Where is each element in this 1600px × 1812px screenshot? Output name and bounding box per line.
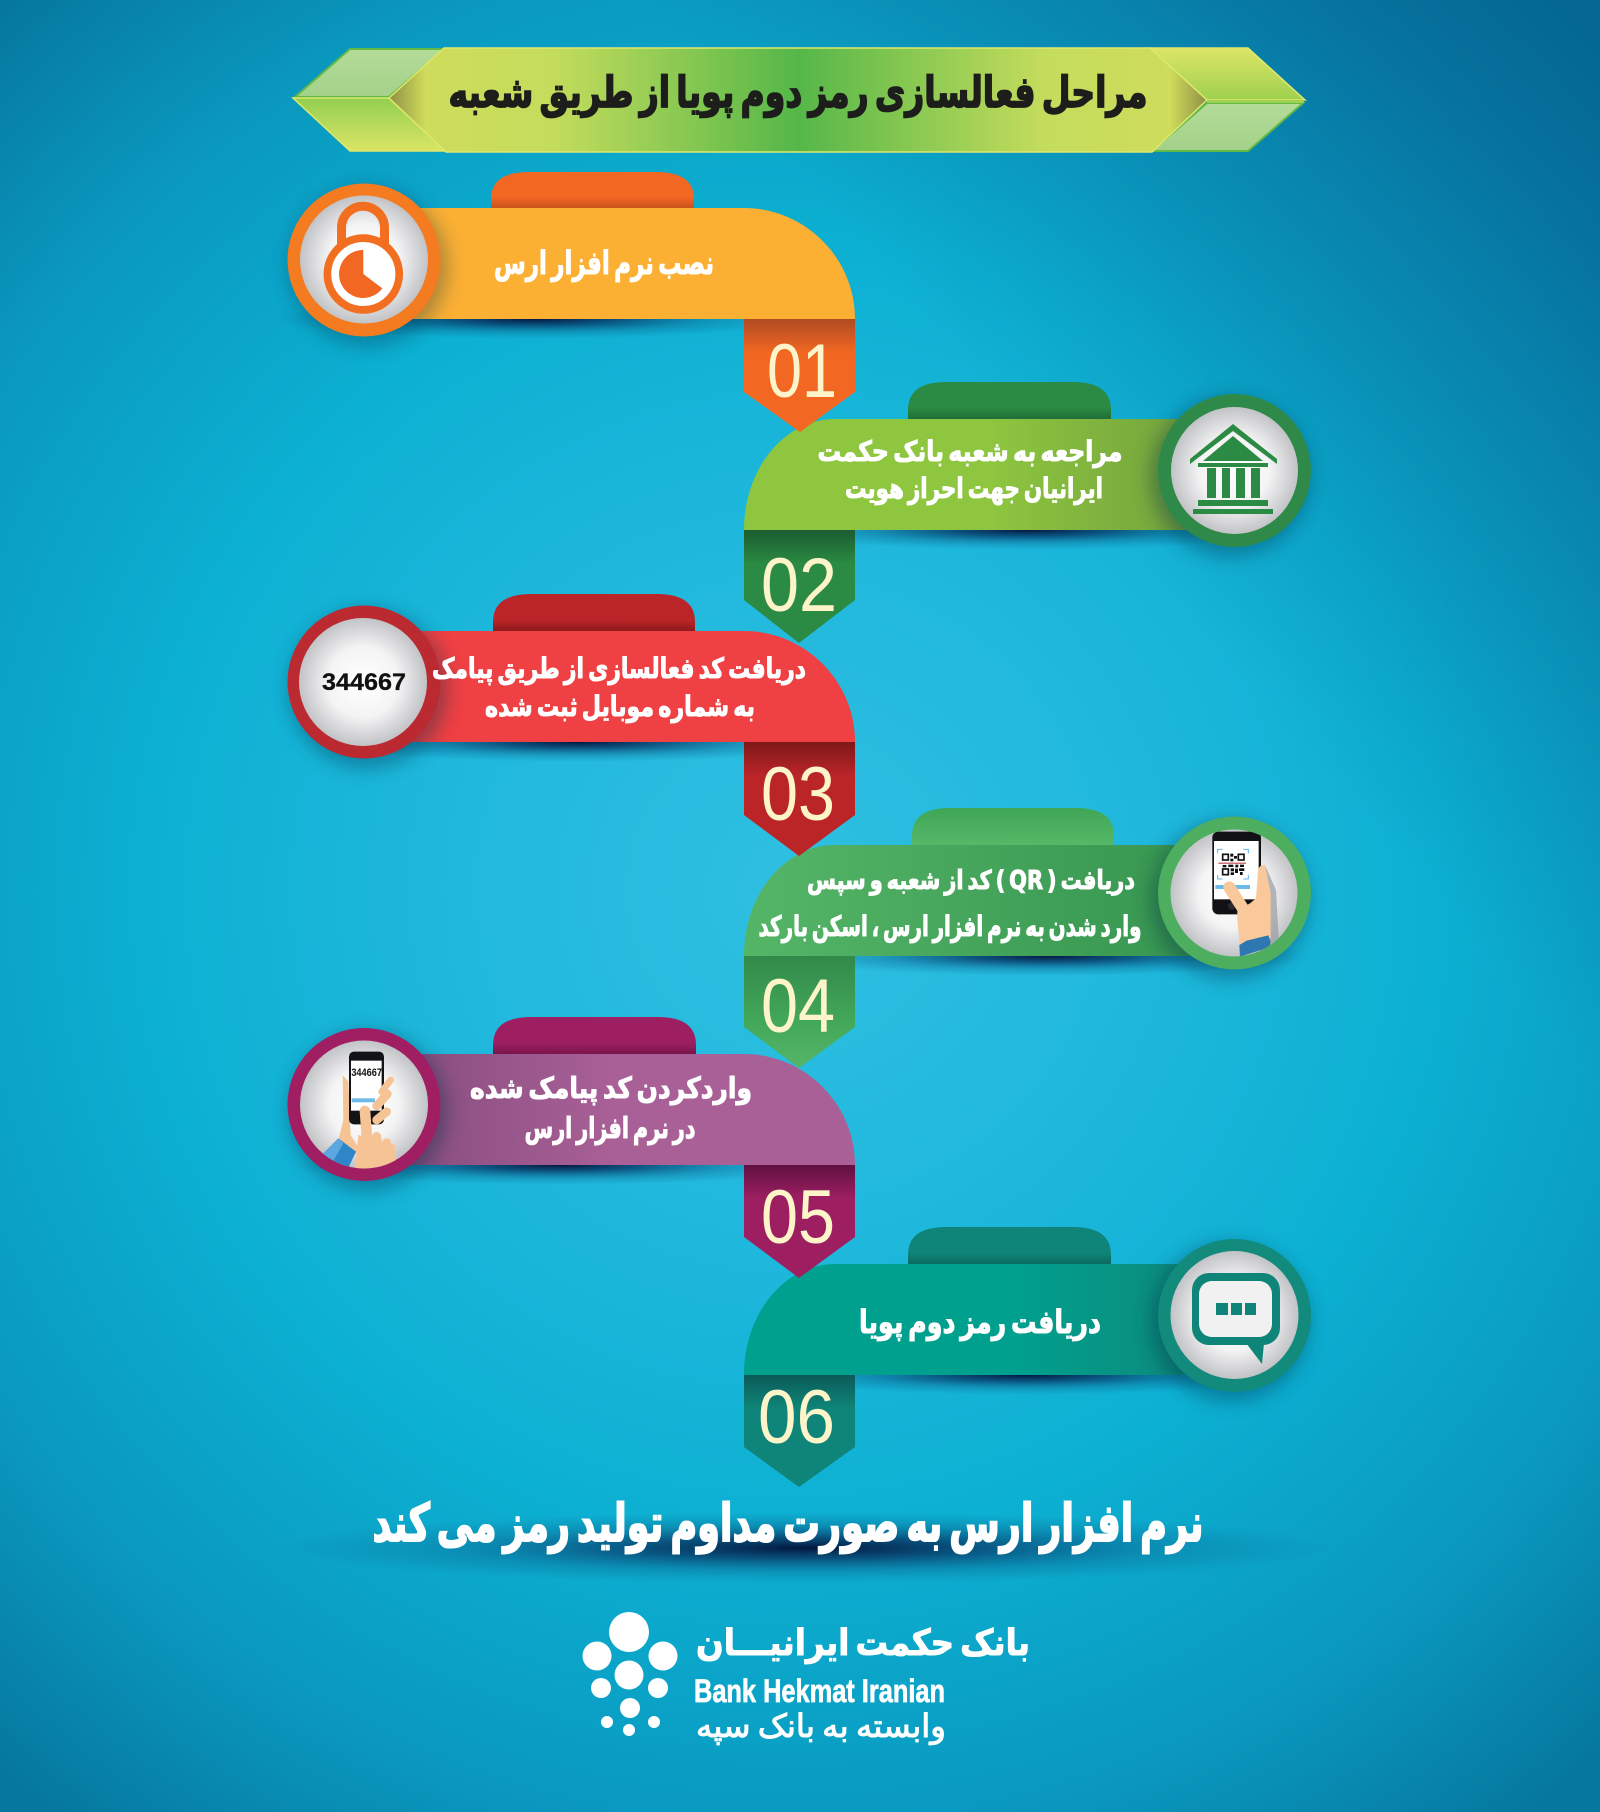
ribbon [400, 1054, 855, 1165]
shadow [763, 510, 1293, 550]
tab [493, 594, 695, 631]
tab [493, 1017, 696, 1054]
ribbon [400, 208, 855, 319]
logo name persian: بانک حکمت ایرانیـــان [696, 1623, 1030, 1664]
number flag [744, 1375, 855, 1487]
shadow [294, 1145, 824, 1185]
logo name latin: Bank Hekmat Iranian [694, 1673, 945, 1709]
icon: hand entering code on phone: 344667 [351, 1067, 382, 1079]
ribbon [744, 1264, 1200, 1375]
label [758, 866, 1142, 943]
shadow [313, 722, 843, 762]
tab [912, 808, 1114, 845]
label: نصب نرم افزار ارس [494, 244, 714, 282]
statement text: نرم افزار ارس به صورت مداوم تولید رمز می کند [372, 1494, 1204, 1554]
label: وارد شدن به نرم افزار ارس ، اسکن بارکد [758, 910, 1142, 943]
banner right wing [1150, 48, 1305, 151]
icon: hand scanning QR code [1150, 816, 1311, 980]
number: 01 [767, 329, 837, 414]
number flag [744, 956, 855, 1068]
icon: code disc [288, 606, 448, 769]
step 2 panel [744, 382, 1311, 643]
icon: hand entering code on phone [288, 1028, 448, 1191]
bank logo [582, 1612, 1030, 1745]
label: واردکردن کد پیامک شده [470, 1071, 752, 1106]
shadow [783, 936, 1313, 976]
label: مراجعه به شعبه بانک حکمت [818, 435, 1122, 468]
ribbon [744, 419, 1200, 530]
label: در نرم افزار ارس [524, 1111, 696, 1145]
step 3 panel [288, 594, 855, 856]
icon: clock padlock [288, 184, 448, 347]
number: 02 [761, 543, 837, 628]
number: 05 [761, 1175, 835, 1260]
label: به شماره موبایل ثبت شده [485, 690, 755, 723]
logo affiliation: وابسته به بانک سپه [696, 1707, 946, 1745]
icon: bank building [1150, 394, 1311, 557]
tab [908, 1227, 1111, 1264]
banner centre [389, 48, 1207, 152]
ribbon [400, 631, 855, 742]
shadow [275, 1512, 1335, 1584]
step 1 panel [270, 172, 855, 432]
number: 06 [758, 1375, 835, 1460]
shadow [270, 299, 800, 339]
number flag [744, 1165, 855, 1278]
ribbon [744, 845, 1200, 956]
number flag [744, 319, 855, 432]
label [432, 652, 806, 723]
step 6 panel [744, 1227, 1311, 1487]
tab [908, 382, 1111, 419]
label [818, 435, 1122, 505]
label: دریافت رمز دوم پویا [859, 1303, 1101, 1341]
label: دریافت ( QR ) کد از شعبه و سپس [807, 866, 1135, 896]
number: 04 [761, 964, 835, 1049]
label [470, 1071, 752, 1145]
title text: مراحل فعالسازی رمز دوم پویا از طریق شعبه [448, 68, 1148, 118]
shadow [760, 1355, 1290, 1395]
number: 03 [761, 752, 835, 837]
number flag [744, 742, 855, 856]
step 5 panel [288, 1017, 855, 1278]
bottom statement [275, 1494, 1335, 1584]
label: ایرانیان جهت احراز هویت [845, 472, 1103, 505]
banner left wing [293, 49, 446, 151]
label: دریافت کد فعالسازی از طریق پیامک [432, 652, 806, 685]
icon: code disc: 344667 [322, 669, 406, 696]
step 4 panel [744, 808, 1313, 1068]
QR code [1218, 849, 1248, 879]
icon: chat bubble [1150, 1239, 1311, 1402]
title banner [293, 48, 1305, 152]
logo mark [582, 1612, 678, 1736]
tab [491, 172, 694, 208]
number flag [744, 530, 855, 643]
